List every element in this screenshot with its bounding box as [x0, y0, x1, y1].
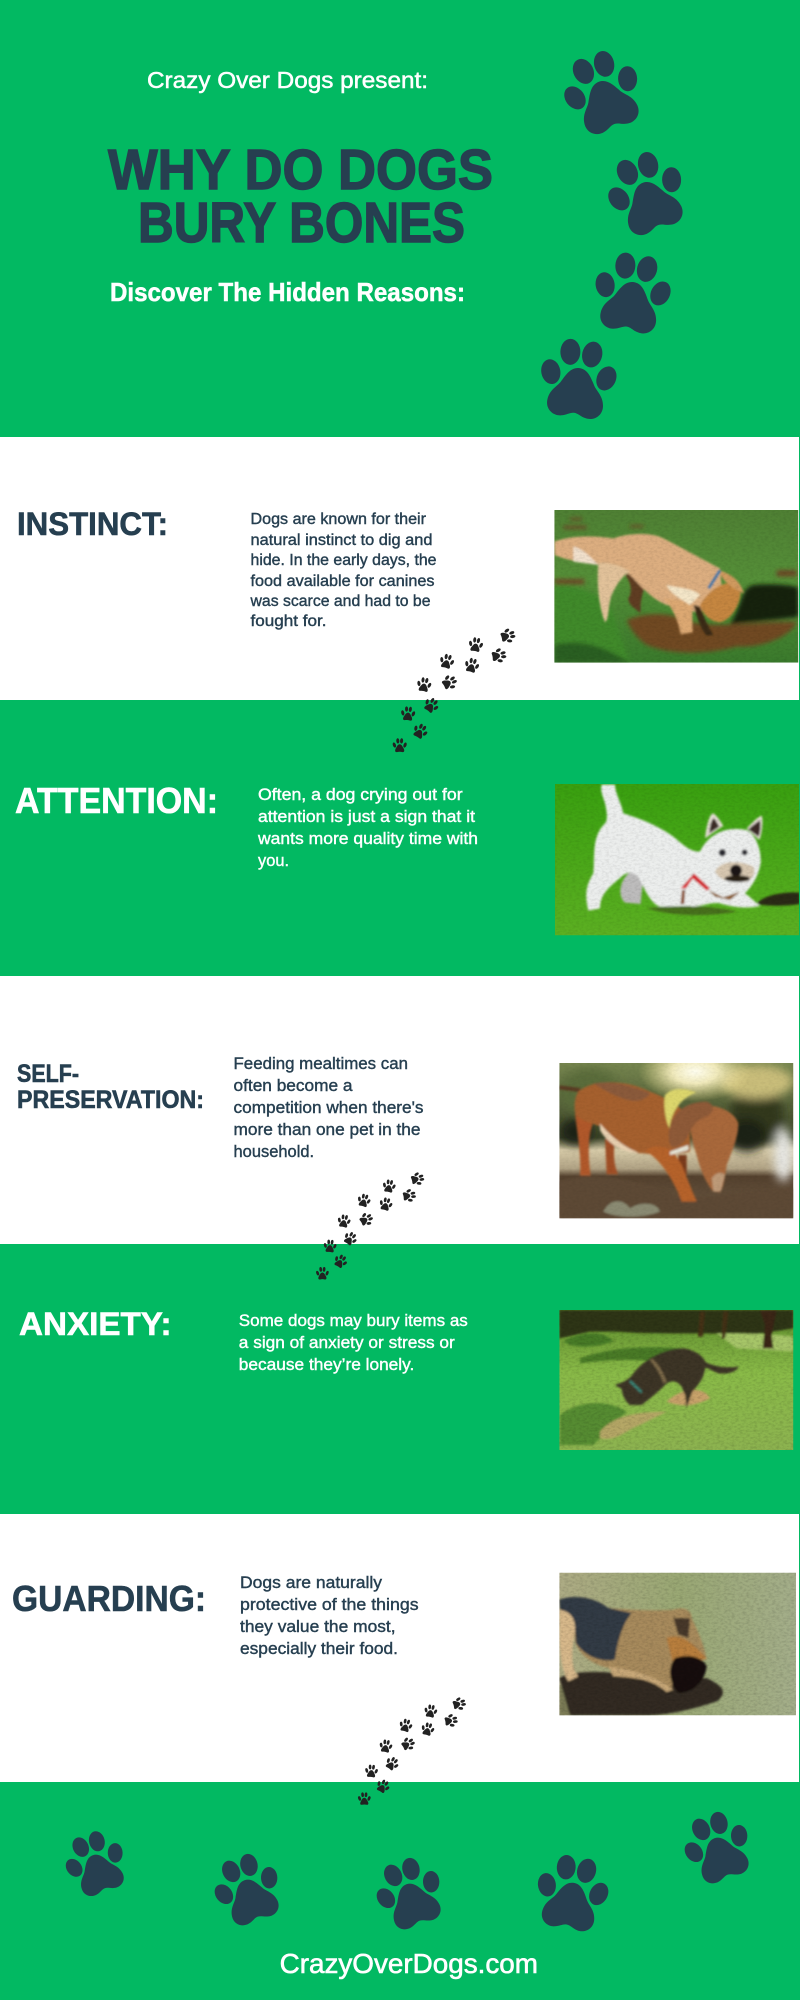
- icon: paw track three: [357, 1696, 467, 1805]
- icon: paw prints column: [533, 41, 698, 422]
- heading: anxiety: ANXIETY:: [19, 1306, 172, 1342]
- footer website: CrazyOverDogs.com: [280, 1948, 538, 1979]
- text: anxiety: Some dogs may bury items as: [239, 1312, 468, 1330]
- heading: self-preservation: [17, 1060, 204, 1114]
- text: self-preservation: competition when there's: [234, 1099, 424, 1117]
- photo: golden retriever digging: [554, 510, 798, 663]
- text: instinct: was scarce and had to be: [249, 593, 430, 610]
- icon: footer paw prints: [55, 1803, 762, 1936]
- text: anxiety: because they’re lonely.: [239, 1356, 414, 1374]
- text: attention: attention is just a sign that it: [258, 808, 475, 826]
- icon: paw track one: [392, 627, 517, 752]
- text: attention: Often, a dog crying out for: [258, 786, 463, 804]
- photo: shepherd digging in a field: [559, 1310, 793, 1450]
- heading: guarding: GUARDING:: [12, 1578, 206, 1619]
- panel: header: [0, 0, 800, 437]
- text: guarding: especially their food.: [240, 1640, 398, 1658]
- photo: west highland terrier digging: [555, 784, 800, 935]
- subtitle: Discover The Hidden Reasons:: [110, 277, 465, 307]
- text: guarding: protective of the things: [240, 1596, 419, 1614]
- heading: instinct: INSTINCT:: [17, 506, 168, 542]
- text: attention: wants more quality time with: [257, 830, 478, 848]
- text: self-preservation: [234, 1055, 424, 1161]
- text: instinct: [249, 511, 436, 630]
- presenter line: Crazy Over Dogs present:: [147, 67, 428, 93]
- heading: attention: ATTENTION:: [15, 780, 218, 821]
- text: instinct: natural instinct to dig and: [250, 532, 432, 549]
- panel: anxiety: [0, 1244, 800, 1514]
- text: instinct: fought for.: [250, 613, 326, 630]
- text: anxiety: [239, 1312, 468, 1374]
- text: self-preservation: more than one pet in the: [234, 1121, 420, 1139]
- text: guarding: they value the most,: [240, 1618, 396, 1636]
- heading: self-preservation: SELF-: [17, 1060, 79, 1088]
- panel: attention: [0, 700, 800, 976]
- text: attention: you.: [258, 852, 289, 870]
- text: self-preservation: often become a: [234, 1077, 353, 1095]
- text: guarding: [240, 1574, 419, 1658]
- text: instinct: hide. In the early days, the: [250, 552, 436, 569]
- right edge strip: [799, 437, 800, 1782]
- title: [108, 138, 493, 255]
- text: self-preservation: Feeding mealtimes can: [234, 1055, 408, 1073]
- panel: footer: [0, 1782, 800, 2000]
- icon: paw track two: [316, 1171, 426, 1279]
- title: WHY DO DOGS: [108, 138, 493, 202]
- text: instinct: Dogs are known for their: [250, 511, 426, 528]
- text: self-preservation: household.: [234, 1143, 314, 1161]
- panel: guarding: [13, 1572, 796, 1716]
- text: anxiety: a sign of anxiety or stress or: [239, 1334, 455, 1352]
- text: attention: [257, 786, 478, 870]
- title: BURY BONES: [138, 191, 465, 255]
- heading: self-preservation: PRESERVATION:: [17, 1086, 204, 1114]
- text: instinct: food available for canines: [250, 573, 435, 590]
- panel: instinct: [18, 510, 798, 663]
- photo: german shepherd digging a hole: [559, 1573, 796, 1715]
- text: guarding: Dogs are naturally: [240, 1574, 383, 1592]
- photo: dachshund digging: [559, 1063, 794, 1218]
- panel: self-preservation: [17, 1056, 794, 1218]
